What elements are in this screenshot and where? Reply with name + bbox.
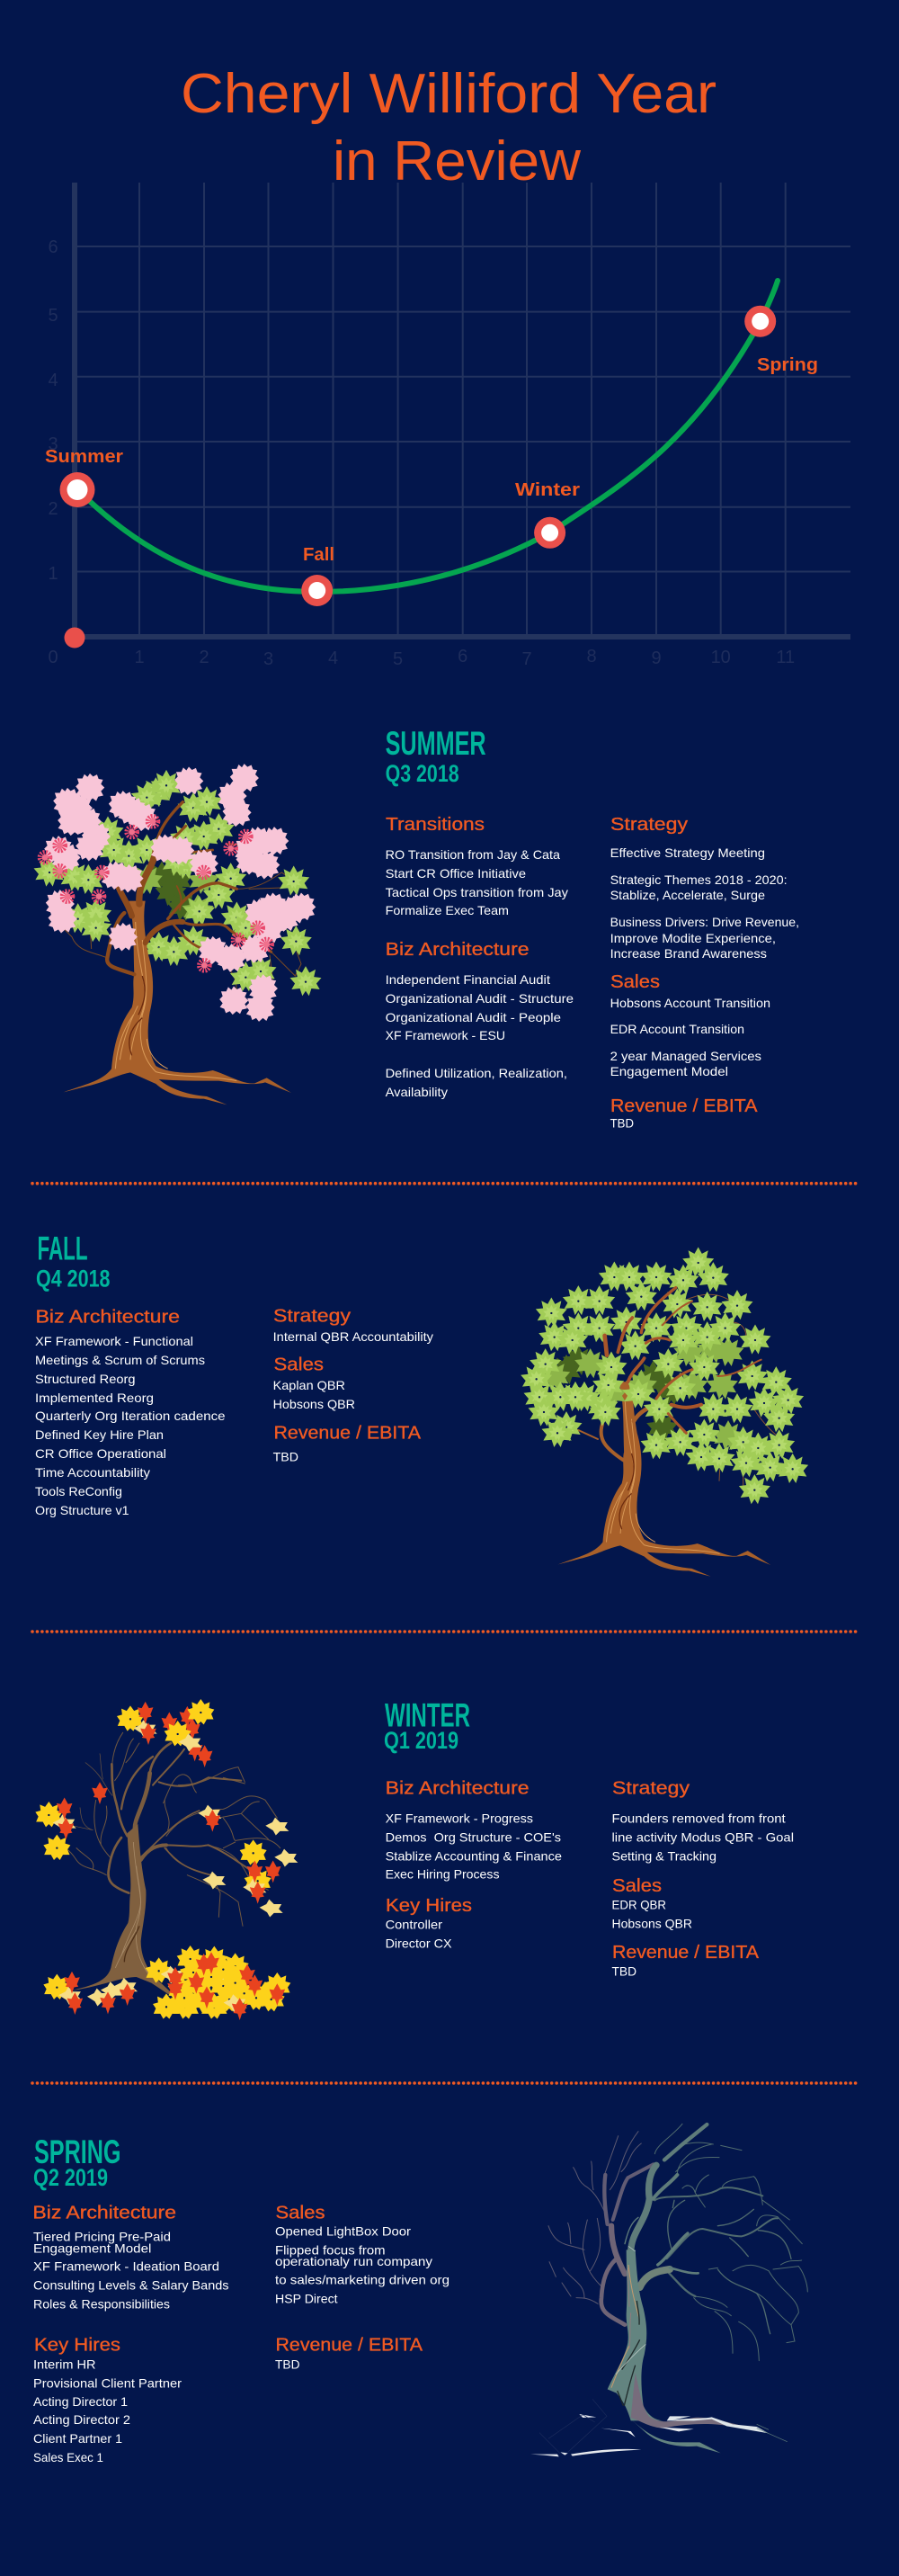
icon: summer blossom tree [34,764,321,1105]
marker: Summer [59,472,95,507]
text block: Sales: to sales/marketing driven org [275,2273,450,2287]
text block: Sales: Sales [275,2203,325,2223]
text block: Strategy: Business Drivers: Drive Revenue, [610,915,799,929]
text block: Strategy: Strategic Themes 2018 - 2020: [610,872,788,887]
icon: winter tree with falling leaves [35,1699,298,2020]
text block: Sales: Sales [610,972,660,992]
axis labels [48,237,795,669]
heading: FALL Q4 2018 [36,1230,110,1292]
text block: Sales [610,972,770,1078]
axis labels: 5 [48,306,58,326]
text block: Sales: Hobsons QBR [273,1397,355,1411]
text block: Sales: 2 year Managed Services [610,1049,761,1063]
text block: Revenue / EBITA [273,1424,422,1464]
text block: Transitions: RO Transition from Jay & Cata [386,847,560,862]
text block: Biz Architecture: Engagement Model [33,2241,151,2256]
text block: Key Hires: Sales Exec 1 [33,2450,103,2464]
marker: origin [65,628,85,648]
text block: Key Hires: Controller [386,1918,442,1932]
panel: summer [34,725,799,1131]
text block: Biz Architecture: Org Structure v1 [35,1503,129,1517]
text block: Sales: HSP Direct [275,2291,338,2305]
icon: spring bare tree with snow [530,2124,807,2456]
heading: FALL Q4 2018: FALL [38,1230,88,1267]
text block: Key Hires: Interim HR [33,2357,95,2371]
panel: fall [35,1230,808,1577]
axis labels: 6 [458,647,467,666]
text block: Revenue / EBITA [611,1943,760,1979]
text block: Biz Architecture: Independent Financial Audit [386,972,550,987]
heading: SUMMER Q3 2018: Q3 2018 [386,760,459,787]
panel: winter [35,1696,794,2020]
axis labels: 4 [328,648,338,668]
text block: Transitions [386,815,568,917]
axis labels: 8 [586,647,597,666]
text block: Key Hires: Director CX [386,1936,452,1951]
text block: Biz Architecture: Quarterly Org Iteration cadence [35,1409,226,1423]
text block: Sales: Opened LightBox Door [275,2224,411,2239]
text block: Strategy: Internal QBR Accountability [273,1329,433,1344]
text block: Key Hires: Provisional Client Partner [33,2375,182,2390]
axis labels: 7 [521,649,532,669]
text block: Biz Architecture [386,1779,562,1882]
text block: Biz Architecture: Stablize Accounting & Finance [386,1849,562,1864]
text block: Strategy: Founders removed from front [611,1811,786,1826]
text block: Strategy: Strategy [610,815,688,835]
axis labels: 3 [48,434,58,454]
heading: SPRING Q2 2019: SPRING [34,2133,120,2170]
text block: Biz Architecture: Defined Key Hire Plan [35,1427,164,1442]
text block: Biz Architecture: Organizational Audit - Structure [386,991,574,1006]
text block: Biz Architecture: Time Accountability [35,1465,150,1480]
text block: Sales [611,1876,692,1931]
heading: WINTER Q1 2019: Q1 2019 [384,1727,458,1754]
axis labels: 2 [48,499,58,519]
heading: WINTER Q1 2019 [384,1696,470,1754]
text block: Sales: Flipped focus from [275,2243,386,2258]
text block: Biz Architecture: Biz Architecture [32,2203,176,2223]
text block: Key Hires: Key Hires [34,2335,120,2355]
text block: Strategy: Setting & Tracking [611,1849,717,1864]
panel: spring [32,2124,807,2464]
text block: Sales: Sales [273,1355,324,1375]
text block: Sales: Hobsons Account Transition [610,996,770,1010]
text block: Key Hires [33,2335,182,2464]
curve labels: Fall [303,545,334,565]
text block: Strategy: Stablize, Accelerate, Surge [610,888,765,902]
title [181,63,717,192]
text block: Biz Architecture: Demos Org Structure - COE's [386,1830,561,1845]
text block: Biz Architecture: Biz Architecture [386,1779,530,1799]
text block: Biz Architecture: XF Framework - ESU [386,1028,505,1042]
axis labels: 6 [48,237,58,257]
title: in Review [333,130,581,192]
axis labels: 2 [199,648,209,667]
text block: Biz Architecture: Defined Utilization, Realization, [386,1066,567,1080]
text block: Strategy [273,1307,433,1344]
curve labels: Winter [515,480,580,500]
text block: Sales: Sales [612,1876,662,1896]
text block: Strategy: Increase Brand Awareness [610,946,767,961]
axis labels: 10 [711,648,731,667]
marker: Spring [744,306,776,337]
green curve [77,281,778,592]
text block: Biz Architecture: Exec Hiring Process [386,1867,500,1882]
axis labels: 9 [651,648,662,668]
text block: Key Hires [386,1896,472,1951]
curve labels: Summer [45,447,123,467]
text block: Biz Architecture: Tiered Pricing Pre-Paid [33,2229,171,2243]
text block: Transitions: Start CR Office Initiative [386,866,526,881]
text block: Biz Architecture: XF Framework - Ideation Board [33,2258,219,2273]
text block: Strategy [611,1779,794,1864]
text block: Biz Architecture: Roles & Responsibilities [33,2296,170,2311]
axis labels: 1 [48,564,58,584]
text block: Sales: Engagement Model [610,1064,728,1078]
line chart: year curve [45,183,850,669]
text block: Revenue / EBITA: TBD [610,1116,634,1131]
text block: Revenue / EBITA: Revenue / EBITA [612,1943,760,1963]
heading: SUMMER Q3 2018 [386,725,486,787]
text block: Biz Architecture [386,940,574,1099]
heading: WINTER Q1 2019: WINTER [385,1696,470,1733]
text block: Key Hires: Acting Director 2 [33,2412,130,2427]
text block: Transitions: Tactical Ops transition from Jay [386,885,568,899]
curve labels [45,355,818,565]
text block: Strategy: Improve Modite Experience, [610,931,776,945]
heading: SPRING Q2 2019 [33,2133,120,2191]
text block: Biz Architecture: Biz Architecture [386,940,530,960]
text block: Biz Architecture: Availability [386,1085,448,1099]
icon: fall green tree [521,1248,808,1577]
text block: Revenue / EBITA [610,1096,758,1131]
text block: Strategy: Strategy [273,1307,351,1327]
text block: Biz Architecture: Meetings & Scrum of Scrums [35,1353,205,1367]
text block: Key Hires: Acting Director 1 [33,2394,128,2409]
marker: Fall [301,575,333,606]
axis labels: 3 [263,649,273,669]
text block: Sales [275,2203,450,2305]
text block: Key Hires: Key Hires [386,1896,472,1916]
title: Cheryl Williford Year [181,63,717,125]
text block: Biz Architecture: XF Framework - Progress [386,1811,533,1826]
axis labels: 5 [393,649,403,669]
axis labels: 4 [48,371,58,390]
text block: Strategy: line activity Modus QBR - Goal [611,1830,794,1845]
text block: Sales: Hobsons QBR [611,1917,692,1931]
text block: Biz Architecture [35,1308,226,1517]
axis labels: 11 [776,648,795,667]
text block: Revenue / EBITA [275,2335,423,2371]
text block: Sales: EDR QBR [611,1898,666,1912]
text block: Revenue / EBITA: Revenue / EBITA [275,2335,423,2355]
text block: Revenue / EBITA: Revenue / EBITA [273,1424,422,1444]
text block: Biz Architecture: Implemented Reorg [35,1391,154,1405]
text block: Transitions: Formalize Exec Team [386,903,509,917]
text block: Transitions: Transitions [386,815,485,835]
text block: Biz Architecture: Biz Architecture [36,1308,180,1328]
text block: Biz Architecture [32,2203,229,2311]
text block: Strategy: Effective Strategy Meeting [610,845,765,860]
text block: Strategy [610,815,799,961]
text block: Sales: Kaplan QBR [273,1378,345,1392]
text block: Biz Architecture: CR Office Operational [35,1446,166,1461]
marker: Winter [534,517,565,549]
text block: Revenue / EBITA: TBD [611,1964,636,1979]
text block: Revenue / EBITA: TBD [275,2357,300,2371]
text block: Biz Architecture: Tools ReConfig [35,1484,122,1498]
text block: Key Hires: Client Partner 1 [33,2431,122,2446]
heading: SUMMER Q3 2018: SUMMER [386,725,486,762]
curve labels: Spring [757,355,818,375]
axis labels: 0 [48,648,58,667]
text block: Biz Architecture: Structured Reorg [35,1372,135,1386]
heading: FALL Q4 2018: Q4 2018 [36,1266,110,1292]
text block: Biz Architecture: XF Framework - Functional [35,1334,193,1348]
text block: Biz Architecture: Consulting Levels & Salary Bands [33,2277,229,2292]
text block: Sales [273,1355,355,1411]
text block: Strategy: Strategy [612,1779,690,1799]
text block: Biz Architecture: Organizational Audit - People [386,1010,561,1024]
text block: Revenue / EBITA: TBD [273,1450,298,1464]
text block: Sales: EDR Account Transition [610,1022,744,1036]
text block: Revenue / EBITA: Revenue / EBITA [610,1096,758,1116]
text block: Sales: operationaly run company [275,2254,432,2268]
heading: SPRING Q2 2019: Q2 2019 [33,2164,108,2191]
axis labels: 1 [134,648,145,667]
